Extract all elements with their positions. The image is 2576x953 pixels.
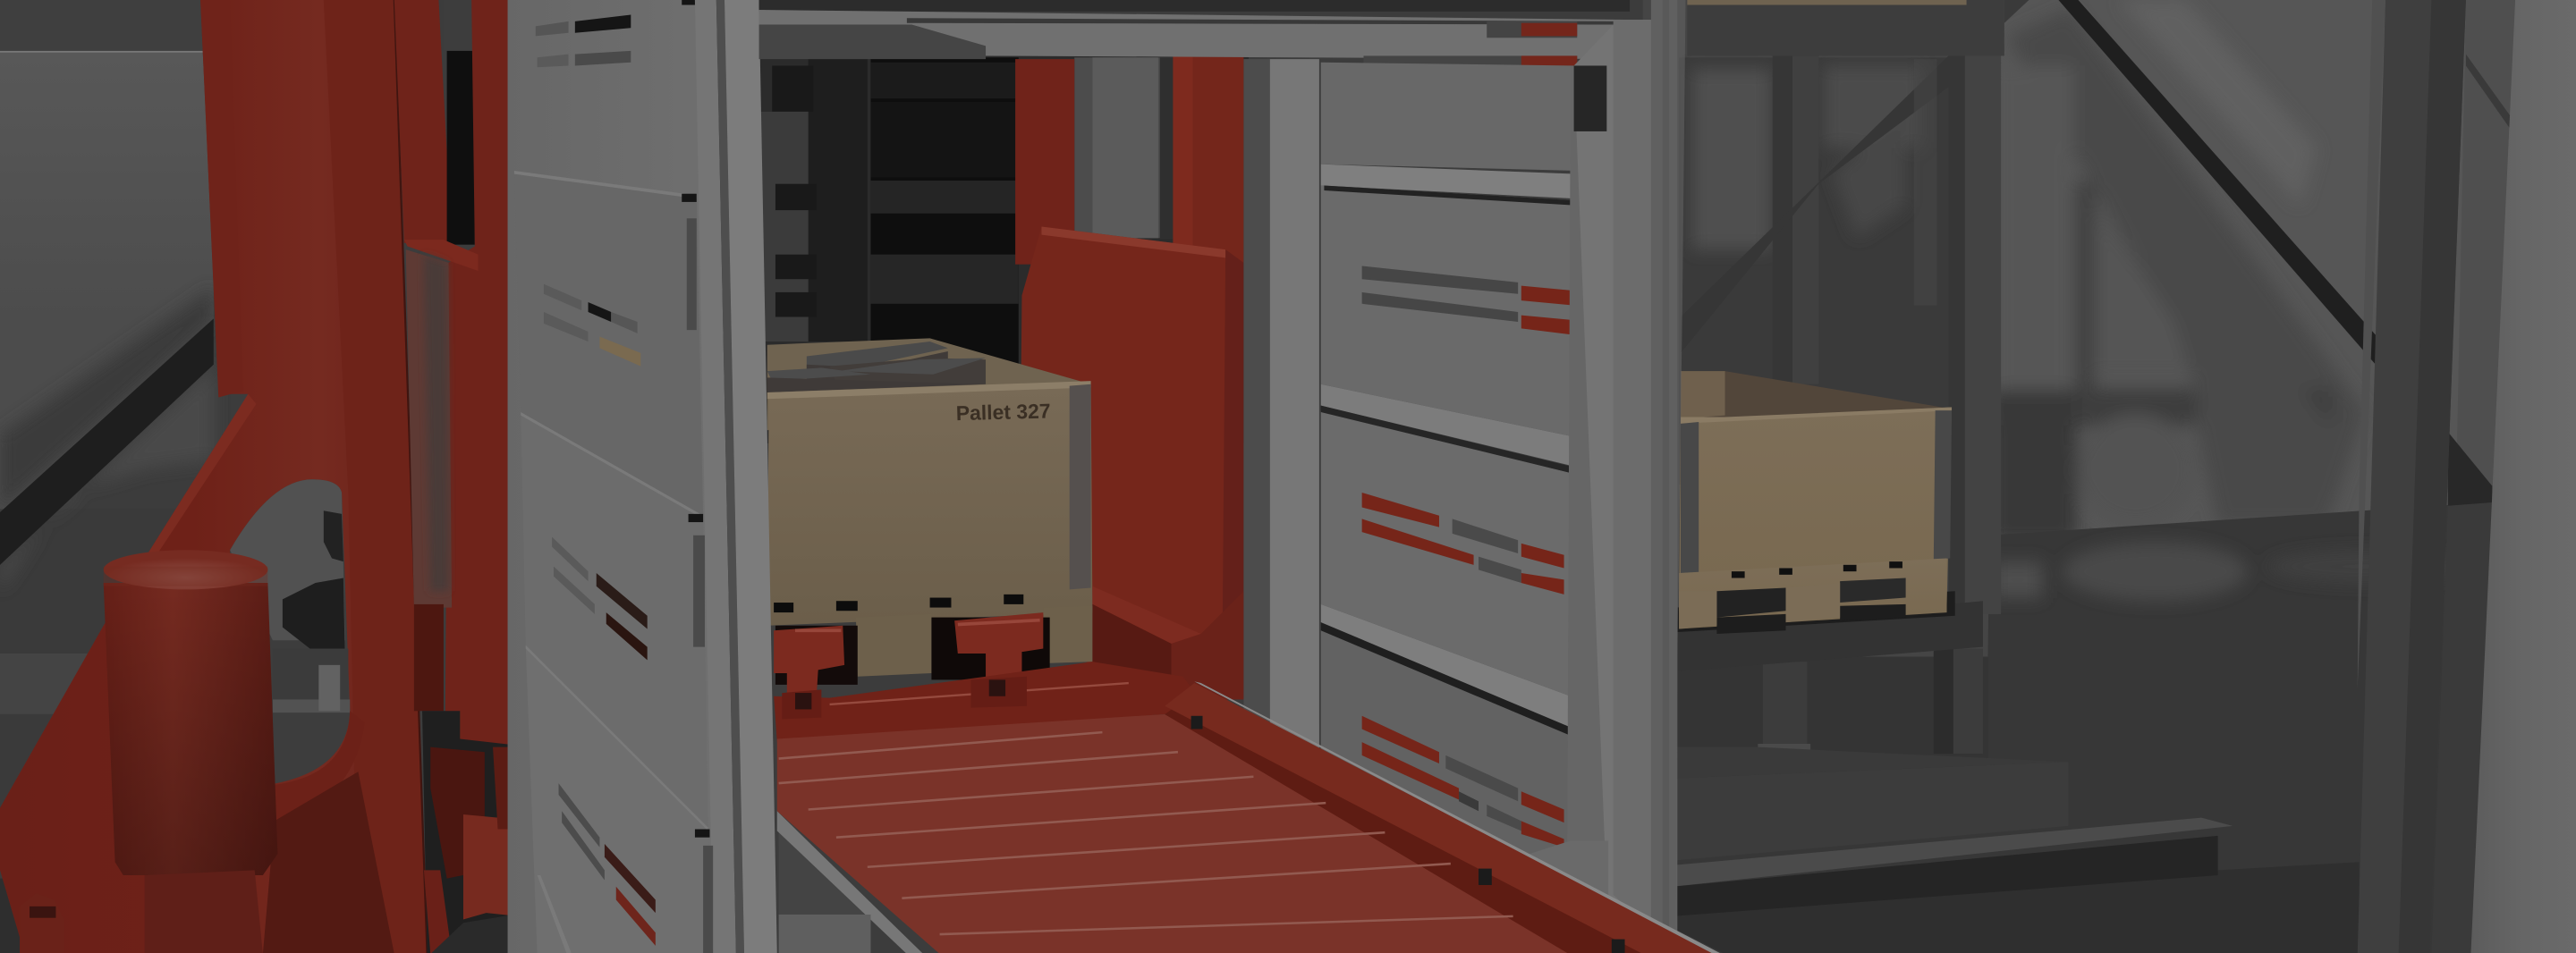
dark opening behind pallet xyxy=(756,49,1249,443)
base ledge xyxy=(1530,840,1608,899)
red conveyor deck xyxy=(774,662,1716,953)
red cylinder xyxy=(104,550,277,953)
conveyor side rail xyxy=(1165,681,1722,953)
pallet gaps between feet xyxy=(1679,578,1906,634)
black storage rack xyxy=(759,57,1019,369)
arch opening with black blocks xyxy=(230,479,350,785)
background wall behind right rack xyxy=(1679,57,1950,485)
red machine frame, left xyxy=(0,0,534,953)
right rack frame xyxy=(1675,0,2029,754)
red uprights and back plate xyxy=(1015,49,1243,699)
grey column panels, left xyxy=(508,0,777,953)
floor steel beams xyxy=(1673,747,2360,953)
right foreground steel columns xyxy=(2358,0,2576,953)
pallet feet xyxy=(856,606,1092,677)
background: left wall panels xyxy=(0,0,247,953)
floor xyxy=(1675,502,2489,953)
grey centre panel stack xyxy=(1243,0,1685,936)
pallet on right rack xyxy=(1679,371,1952,634)
left panel slots xyxy=(536,15,656,946)
top cross beam xyxy=(759,0,1630,67)
pallet 327 xyxy=(767,338,1092,677)
red pallet grippers xyxy=(774,586,1243,699)
centre panel slots xyxy=(1362,266,1574,848)
background: warehouse wall xyxy=(1643,0,2576,953)
text: pallet label: Pallet 327 xyxy=(955,399,1051,425)
dark load in pallet xyxy=(767,342,986,392)
